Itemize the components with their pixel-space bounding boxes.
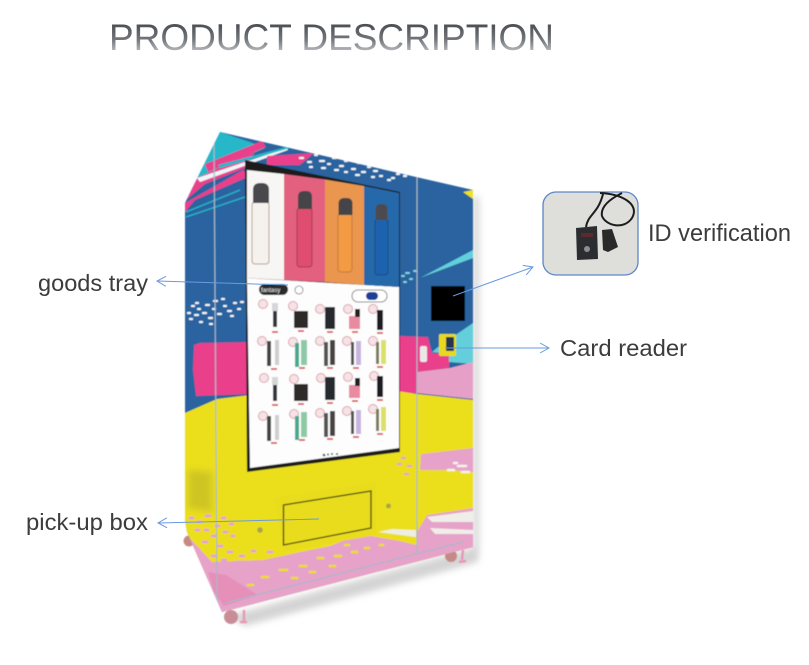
row 4 xyxy=(258,404,386,444)
label: ID verification: ID verification xyxy=(648,221,791,247)
cabinet artwork xyxy=(180,125,480,615)
pod: pink xyxy=(297,191,312,267)
screen frame xyxy=(245,160,400,472)
reader body xyxy=(576,226,598,260)
arrow: ID verification xyxy=(453,267,533,296)
caster wheels xyxy=(184,536,466,624)
cyan and pink door patches xyxy=(432,323,473,364)
brand pill and icons: fantasy xyxy=(261,288,280,294)
ID scanner window xyxy=(431,286,465,321)
pod: orange xyxy=(338,198,352,272)
row 1 xyxy=(258,300,383,334)
pod: white xyxy=(252,183,269,264)
card reader device xyxy=(439,334,456,356)
serial connector xyxy=(602,229,618,252)
pink bands xyxy=(193,342,250,396)
label: goods tray: goods tray xyxy=(38,270,148,296)
white speckles left xyxy=(188,299,243,324)
label: pick-up box: pick-up box xyxy=(26,509,148,535)
yellow corner xyxy=(463,190,473,199)
brand pill and icons xyxy=(259,284,387,302)
arrow: pick-up box xyxy=(158,519,319,523)
product banner xyxy=(247,170,399,287)
row 2 xyxy=(258,336,386,370)
title: PRODUCT DESCRIPTION xyxy=(109,17,554,58)
top paint strokes xyxy=(197,132,265,178)
side lock xyxy=(420,346,427,362)
floor shadow xyxy=(228,195,479,626)
door seams xyxy=(214,132,463,603)
product grid xyxy=(258,300,386,456)
row 3 xyxy=(260,372,383,406)
pale pink lower paint xyxy=(187,534,473,613)
cable xyxy=(586,193,634,227)
arrow: card reader xyxy=(445,347,549,349)
cyan stroke on door xyxy=(420,250,473,278)
label: card reader: Card reader xyxy=(560,335,687,361)
screen white background xyxy=(247,278,399,468)
pod: blue xyxy=(375,204,388,275)
arrow: goods tray xyxy=(157,281,288,285)
pick-up box xyxy=(257,482,391,551)
left side shading xyxy=(188,470,212,512)
pagination dots xyxy=(323,453,338,456)
white speckles top xyxy=(300,155,406,180)
ID verification photo xyxy=(543,192,638,275)
touch screen xyxy=(245,160,400,472)
yellow lower body xyxy=(185,391,473,612)
vending machine xyxy=(180,125,480,626)
